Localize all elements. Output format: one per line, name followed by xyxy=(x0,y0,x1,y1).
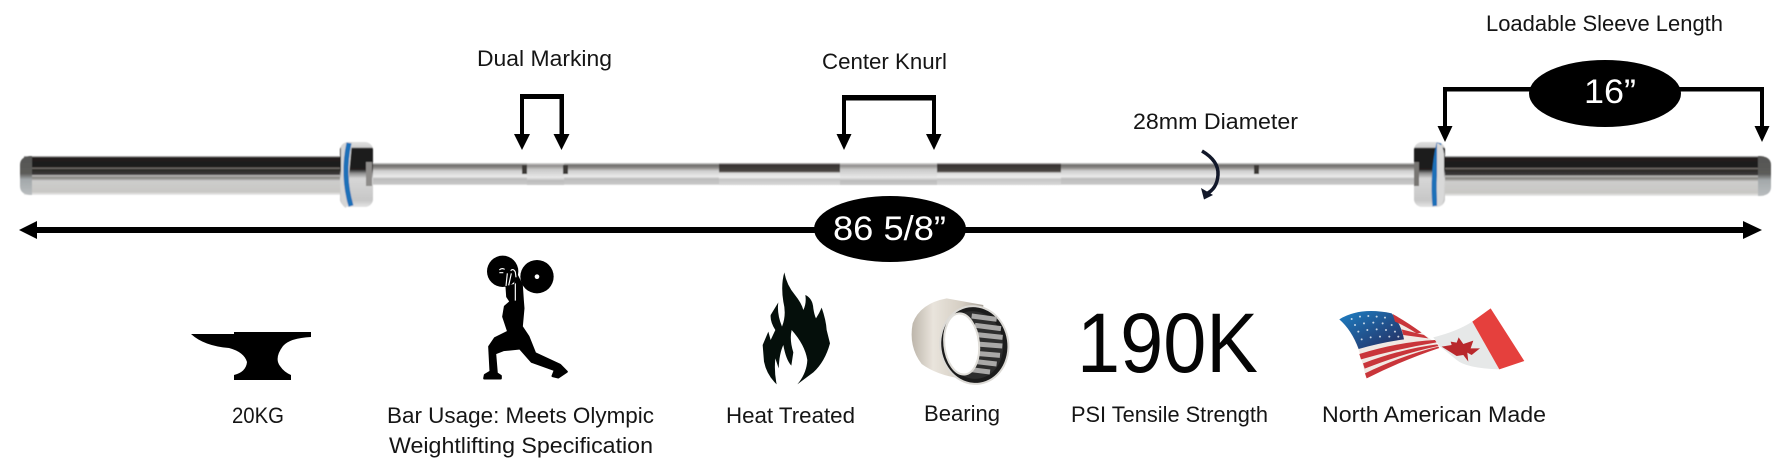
arrow: overall length xyxy=(19,221,1762,239)
icon: needle bearing xyxy=(912,298,1015,389)
text: PSI tensile strength: PSI Tensile Strength xyxy=(1071,402,1268,427)
left collar xyxy=(340,142,373,208)
feature: tensile strength xyxy=(1071,296,1268,427)
label: Dual Marking: Dual Marking xyxy=(477,46,612,71)
feature: Bar Usage: Weightlifting Specification xyxy=(389,433,653,458)
arrow: sleeve length bracket xyxy=(1438,87,1770,142)
left sleeve xyxy=(20,156,342,195)
feature: 20KG xyxy=(191,332,311,428)
callout: 16 inch: 16” xyxy=(1584,73,1636,111)
icon: rotation arrow xyxy=(1201,151,1218,200)
text: 20KG: 20KG xyxy=(232,403,284,428)
feature: Bar Usage xyxy=(387,256,654,458)
icon: weightlifter xyxy=(484,256,567,378)
label: Center Knurl: Center Knurl xyxy=(822,49,947,74)
feature: North American Made xyxy=(1322,308,1546,427)
text: heat treated: Heat Treated xyxy=(726,403,855,428)
callout: 86 5/8 inch: 86 5/8” xyxy=(833,210,946,248)
icon: US and Canada flag xyxy=(1339,308,1524,378)
label: 28mm Diameter: 28mm Diameter xyxy=(1133,109,1298,134)
text: north american made: North American Made xyxy=(1322,402,1546,427)
feature: Bearing xyxy=(912,298,1015,426)
text: bearing: Bearing xyxy=(924,401,1000,426)
callout: 86 5/8 inch xyxy=(814,196,966,262)
icon: anvil xyxy=(191,332,311,380)
callout: 16 inch xyxy=(1529,60,1681,127)
text: 190K: 190K xyxy=(1077,296,1258,390)
label: Loadable Sleeve Length: Loadable Sleeve Length xyxy=(1486,11,1723,36)
icon: flame xyxy=(763,272,830,384)
text: bar usage: Bar Usage: Meets Olympic xyxy=(387,403,654,428)
right sleeve xyxy=(1442,156,1771,196)
arrow: dual marking bracket xyxy=(514,94,570,150)
right collar xyxy=(1414,142,1445,207)
barbell xyxy=(20,142,1771,208)
feature: Heat Treated xyxy=(726,272,855,428)
shaft xyxy=(370,163,1418,185)
arrow: center knurl bracket xyxy=(836,95,942,150)
